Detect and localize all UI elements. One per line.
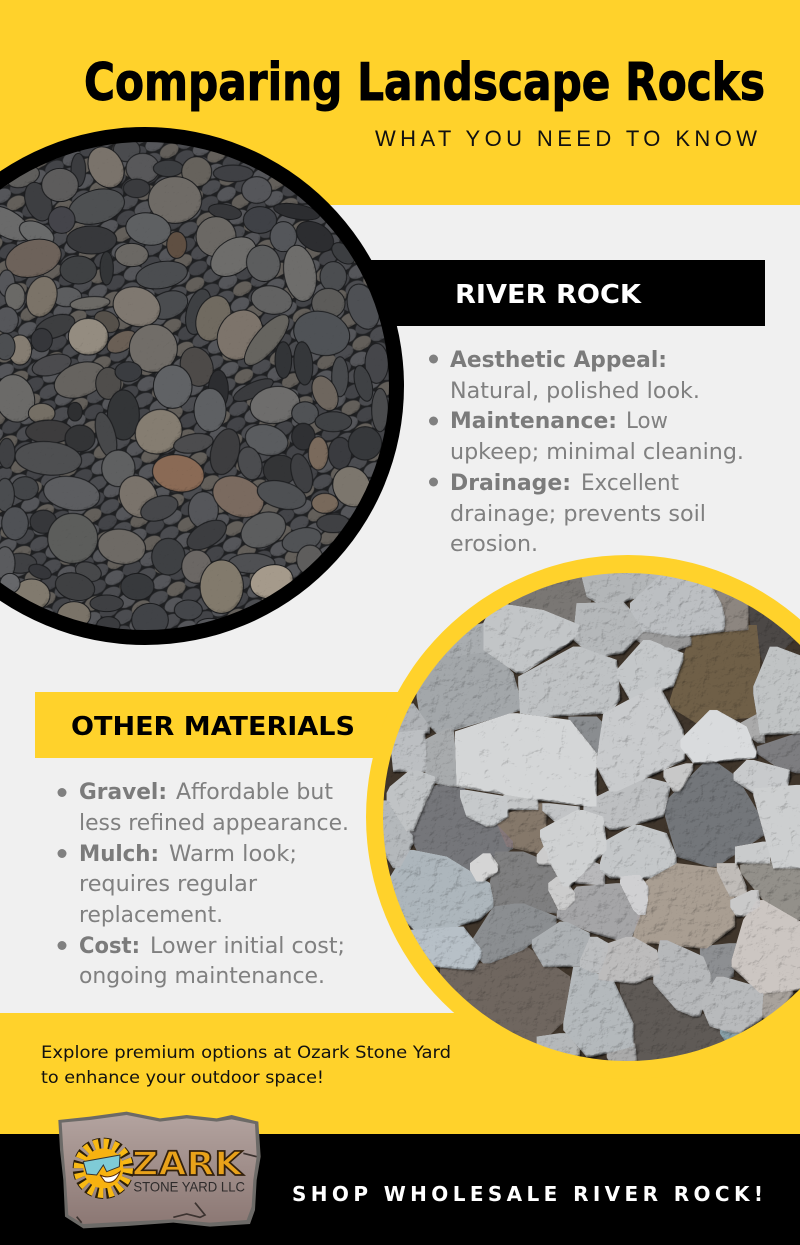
panel: other materials heading bar: OTHER MATERIALS	[71, 712, 355, 742]
header band	[0, 0, 800, 205]
bullet: gravel	[58, 780, 349, 836]
bullet: maintenance: upkeep; minimal cleaning.	[450, 440, 744, 465]
panel: other materials heading bar	[35, 692, 405, 758]
subtitle: WHAT YOU NEED TO KNOW	[375, 126, 757, 151]
bullet: cost: ongoing maintenance.	[79, 964, 325, 989]
bullet: aesthetic appeal: Natural, polished look.	[450, 379, 700, 404]
bullet: drainage: Excellent	[581, 471, 679, 496]
bullet: maintenance: Maintenance:	[450, 409, 617, 434]
bullet: drainage: erosion.	[450, 532, 538, 557]
bullet: gravel: Affordable but	[176, 780, 333, 805]
panel: river rock heading bar: RIVER ROCK	[455, 280, 642, 310]
call to explore text: Explore premium options at Ozark Stone Yard	[41, 1043, 451, 1063]
photo: stone wall circle	[366, 543, 800, 1079]
river rock bullet list	[429, 348, 744, 557]
bullet: gravel: less refined appearance.	[79, 811, 349, 836]
footer yellow band	[0, 1013, 800, 1134]
call to explore text	[41, 1043, 451, 1088]
bullet: mulch: replacement.	[79, 903, 223, 928]
bullet: mulch: requires regular	[79, 872, 258, 897]
logo cracks	[77, 1153, 257, 1223]
bullet: mulch	[58, 842, 297, 928]
logo: Ozark Stone Yard LLC	[58, 1112, 261, 1228]
panel: river rock heading bar	[360, 260, 765, 326]
bullet: aesthetic appeal: Aesthetic Appeal:	[450, 348, 667, 373]
bullet: maintenance: Low	[626, 409, 668, 434]
bullet: drainage	[429, 471, 706, 557]
bullet: drainage: drainage; prevents soil	[450, 502, 706, 527]
footer black band	[0, 1134, 800, 1245]
bullet: cost: Cost:	[79, 934, 140, 959]
photo: river rock circle	[0, 123, 413, 645]
logo wordmark: ZARK	[132, 1144, 244, 1183]
call to explore text: to enhance your outdoor space!	[41, 1068, 324, 1088]
bullet: mulch: Mulch:	[79, 842, 159, 867]
bullet: aesthetic appeal	[429, 348, 700, 404]
bullet: maintenance	[429, 409, 744, 465]
bullet: drainage: Drainage:	[450, 471, 571, 496]
other materials bullet list	[58, 780, 349, 989]
bullet: cost	[58, 934, 345, 989]
bullet: gravel: Gravel:	[79, 780, 167, 805]
logo: Ozark Stone Yard LLC: STONE YARD LLC	[133, 1180, 245, 1195]
logo stone plate	[58, 1112, 261, 1228]
bullet: mulch: Warm look;	[169, 842, 297, 867]
bullet: cost: Lower initial cost;	[150, 934, 345, 959]
shop wholesale call to action: SHOP WHOLESALE RIVER ROCK!	[292, 1182, 763, 1206]
logo sun	[79, 1144, 127, 1192]
